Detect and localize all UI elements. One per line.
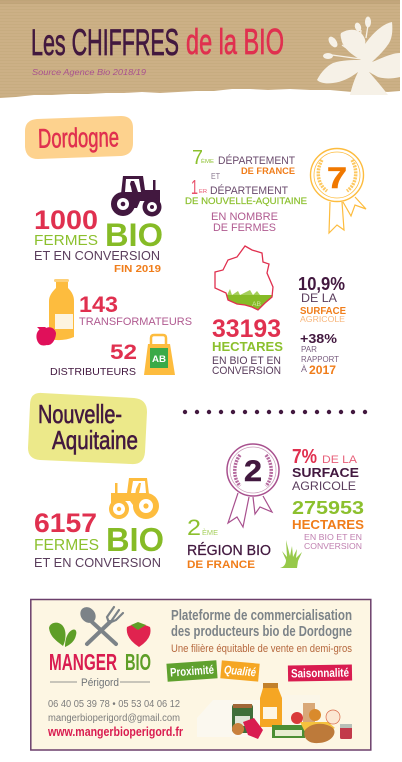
rank 2nd: [187, 515, 218, 540]
figure: 275953: 275953: [292, 497, 364, 518]
panel: region ranking: [187, 515, 271, 571]
panel: transformers: [36, 279, 192, 345]
figure: 7% de la: [292, 446, 358, 468]
rank 7th: DE FRANCE: [241, 166, 295, 177]
label: en nombre de fermes: DE FERMES: [213, 222, 276, 234]
contact details: mangerbioperigord@gmail.com: [48, 713, 180, 724]
label: en nombre de fermes: EN NOMBRE: [211, 211, 278, 223]
icon: Dordogne map: AB: [252, 302, 261, 308]
tag: proximité: Proximité: [170, 662, 215, 680]
contact details: 06 40 05 39 78 • 05 53 04 06 12: [48, 699, 180, 710]
contact details: www.mangerbioperigord.fr: [47, 724, 183, 739]
label: bio: BIO: [105, 217, 163, 253]
logo: manger bio: BIO: [125, 649, 151, 675]
rank 7th: 7: [192, 147, 203, 169]
label: et en conversion: ET EN CONVERSION: [34, 556, 161, 570]
icon: medal rank 7: [310, 148, 366, 233]
advert headline: [171, 607, 352, 655]
figure: 7% de la: 7%: [292, 446, 317, 468]
label: en bio et en conversion: [304, 532, 362, 551]
icon: cream flower: [317, 16, 400, 95]
heading badge: Dordogne: Dordogne: [38, 122, 119, 154]
rank 7th: [192, 147, 295, 177]
label: par rapport à 2017: 2017: [309, 365, 336, 377]
label: surface: SURFACE: [300, 306, 346, 317]
rank 1st: ER: [199, 189, 207, 195]
heading badge: Nouvelle-Aquitaine: [28, 393, 147, 464]
contact details: [47, 699, 183, 739]
label: par rapport à 2017: RAPPORT: [301, 355, 339, 364]
panel: Dordogne farms: [34, 176, 163, 275]
label: distributeurs: DISTRIBUTEURS: [50, 366, 136, 378]
label: fermes: FERMES: [34, 537, 99, 554]
icon: medal rank 2: [227, 444, 279, 527]
panel: distributors: [50, 335, 175, 378]
icon: medal rank 7: 7: [327, 162, 347, 195]
label: par rapport à 2017: PAR: [301, 345, 317, 354]
advert headline: Plateforme de commercialisation: [171, 607, 352, 624]
source line: Source Agence Bio 2018/19: [32, 67, 146, 77]
logo: manger bio: Périgord: [81, 677, 119, 689]
icon: Dordogne map: [215, 246, 273, 310]
heading badge: Nouvelle-Aquitaine: Nouvelle-: [38, 399, 122, 429]
figure: 1000: 1000: [34, 205, 98, 235]
label: hectares: HECTARES: [292, 517, 364, 532]
label: et en conversion: ET EN CONVERSION: [34, 249, 160, 263]
figure: +38%: +38%: [300, 332, 337, 346]
label: hectares: HECTARES: [212, 339, 283, 354]
tag: saisonnalité: Saisonnalité: [291, 665, 349, 681]
heading badge: Nouvelle-Aquitaine: Aquitaine: [52, 425, 138, 455]
label: par rapport à 2017: [301, 345, 339, 377]
rank 2nd: ÈME: [202, 528, 218, 537]
panel: Dordogne surface share: [298, 274, 346, 377]
label: agricole: AGRICOLE: [300, 314, 345, 324]
label: en bio et en conversion: EN BIO ET EN: [212, 355, 281, 367]
icon: juice bottle: [49, 279, 74, 340]
icon: apple: [36, 327, 56, 345]
label: transformateurs: TRANSFORMATEURS: [79, 316, 192, 328]
illustration: food products: [197, 683, 352, 743]
icon: strawberry: [127, 622, 151, 647]
panel: Dordogne hectares: [212, 315, 283, 377]
icon: green leaves: [49, 623, 76, 647]
label: en bio et en conversion: [212, 355, 281, 377]
panel: national ranking text: [185, 147, 307, 234]
figure: 52: 52: [110, 341, 137, 364]
panel: Manger Bio advert: [31, 600, 371, 750]
header: kraft paper band: [0, 0, 400, 98]
logo: manger bio: [49, 649, 151, 689]
icon: AB shopping bag: AB: [152, 354, 167, 364]
figure: 7% de la: DE LA: [322, 454, 358, 466]
advert headline: Une filière équitable de vente en demi-gros: [171, 643, 352, 655]
heading badge: Dordogne: [25, 116, 133, 159]
rank 1st: 1: [191, 177, 198, 199]
title: Les CHIFFRES: [31, 22, 179, 63]
figure: 33193: 33193: [212, 315, 281, 343]
rank 7th: ÈME: [201, 158, 215, 165]
label: en bio et en conversion: EN BIO ET EN: [304, 532, 362, 542]
panel: region surface and hectares: [292, 446, 364, 551]
icon: dark tractor: [111, 176, 162, 216]
tag: qualité: [220, 660, 260, 682]
icon: spoon and fork: [77, 604, 123, 644]
label: bio: BIO: [106, 521, 164, 558]
label: surface: SURFACE: [292, 465, 359, 480]
figure: 6157: 6157: [34, 508, 97, 538]
rank 1st: DE NOUVELLE-AQUITAINE: [185, 196, 307, 207]
rank 1st: DÉPARTEMENT: [210, 184, 288, 197]
rank 1st: [185, 177, 307, 207]
icon: orange tractor: [109, 478, 159, 519]
label: fin 2019: FIN 2019: [114, 263, 161, 275]
label: en bio et en conversion: CONVERSION: [304, 541, 362, 551]
icon: medal rank 2: 2: [244, 455, 262, 488]
figure: 10,9%: 10,9%: [298, 274, 345, 294]
label: de la: DE LA: [301, 293, 337, 305]
figure: 143: 143: [79, 292, 118, 317]
rank 7th: DÉPARTEMENT: [218, 154, 295, 167]
connector: et: ET: [211, 172, 220, 181]
tag: proximité: [166, 660, 218, 682]
panel: Nouvelle-Aquitaine farms: [34, 478, 164, 570]
label: en bio et en conversion: CONVERSION: [212, 365, 281, 377]
logo: manger bio: MANGER: [49, 649, 117, 675]
label: région bio: RÉGION BIO: [187, 542, 271, 559]
rank 2nd: 2: [187, 515, 201, 540]
title: de la BIO: [186, 21, 284, 62]
label: fermes: FERMES: [34, 232, 98, 249]
icon: grass tuft: [280, 540, 302, 568]
label: en nombre de fermes: [211, 211, 278, 234]
label: par rapport à 2017: À: [301, 365, 308, 374]
label: agricole: AGRICOLE: [292, 479, 356, 493]
label: de france: DE FRANCE: [187, 559, 255, 571]
tag: qualité: Qualité: [223, 663, 257, 679]
